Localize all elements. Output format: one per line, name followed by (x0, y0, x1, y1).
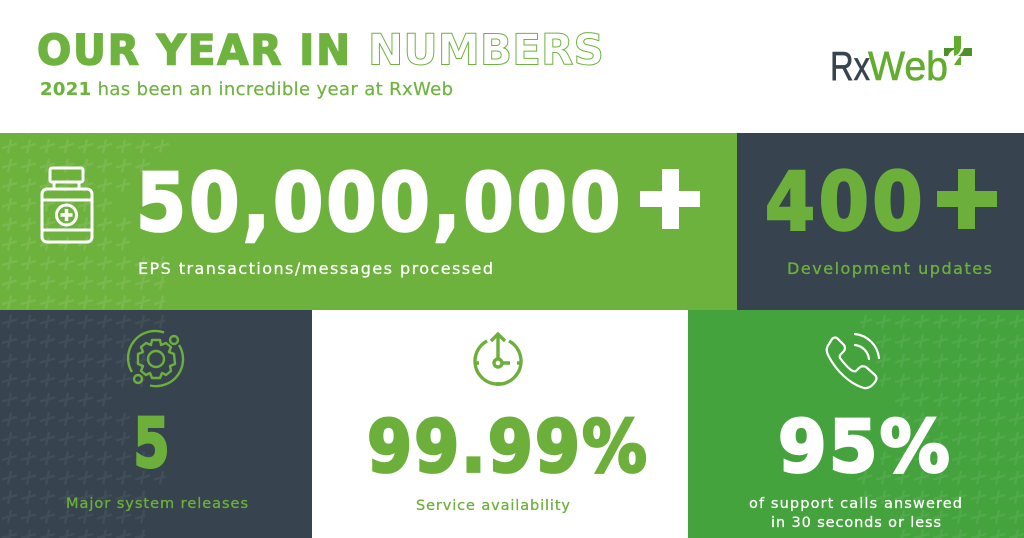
background plus pattern (0, 312, 165, 538)
subtitle: 2021 has been an incredible year at RxWeb (40, 79, 453, 100)
background plus pattern (855, 312, 1024, 538)
logo: RxWeb: Rx (830, 43, 870, 89)
label: calls (749, 496, 962, 531)
background plus pattern (0, 133, 170, 310)
title: OUR YEAR IN (37, 26, 350, 75)
label: calls: of support calls answered (749, 496, 962, 512)
logo: RxWeb: Web (868, 43, 948, 89)
title: NUMBERS (368, 26, 604, 76)
logo: RxWeb (830, 36, 972, 89)
icon: gear with orbit (128, 331, 183, 386)
label: releases: Major system releases (66, 496, 248, 512)
panel: 5 releases (0, 310, 312, 538)
icon: clock with arrow (475, 334, 521, 386)
panel: 95% calls (688, 310, 1024, 538)
header (37, 26, 972, 100)
label: updates: Development updates (787, 259, 992, 278)
stat: 50,000,000+: 50,000,000 (136, 156, 620, 249)
panel: 99.99% availability (312, 310, 688, 538)
panel: 400+ updates (737, 133, 1024, 310)
label: calls: in 30 seconds or less (771, 515, 941, 531)
stat: 5: 5 (134, 404, 170, 484)
title (37, 26, 604, 76)
label: transactions: EPS transactions/messages processed (138, 259, 493, 278)
label: availability: Service availability (416, 498, 570, 514)
stat: 400+: 400 (765, 155, 923, 248)
stat: 99.99%: 99.99% (367, 405, 647, 489)
icon: phone (827, 334, 879, 388)
stat: 400+ (765, 155, 997, 248)
icon: medicine bottle (42, 168, 92, 242)
stat: 95%: 95% (778, 405, 950, 489)
panel: 50,000,000+ transactions (0, 133, 737, 310)
